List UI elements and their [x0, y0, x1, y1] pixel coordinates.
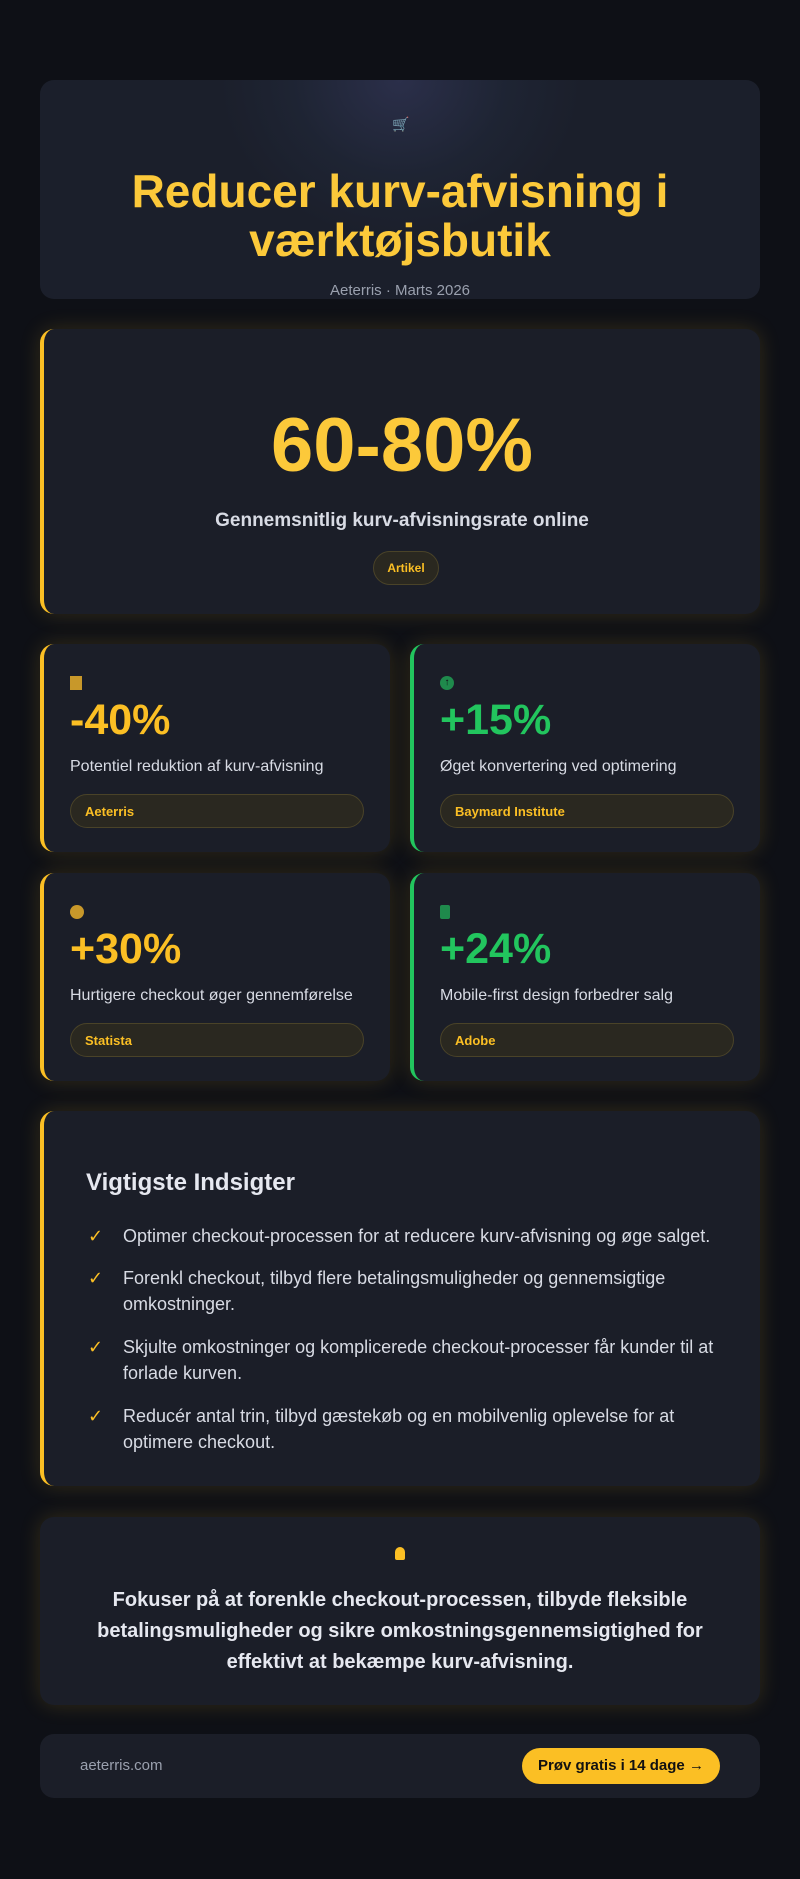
stat card: +24% — [410, 873, 760, 1081]
insight 4: ✓ — [88, 1406, 103, 1426]
stat card: -40%: -40% — [70, 696, 170, 744]
badge: Artikel — [373, 551, 439, 585]
insight 3: Skjulte omkostninger og komplicerede checkout-processer får kunder til at forlade kurven. — [123, 1337, 713, 1383]
panel: key insights — [40, 1111, 760, 1486]
stat card: +15%: Øget konvertering ved optimering — [440, 758, 677, 775]
hero stat card — [40, 329, 760, 614]
title: værktøjsbutik — [249, 214, 551, 266]
hero value: 60-80% — [271, 403, 533, 488]
icon: lightbulb — [395, 1547, 405, 1560]
stat card: +30%: +30% — [70, 925, 181, 973]
insight 1: Optimer checkout-processen for at reducere kurv-afvisning og øge salget. — [123, 1226, 710, 1246]
stat card: +30% — [40, 873, 390, 1081]
stat card: +30%: Hurtigere checkout øger gennemførelse — [70, 987, 353, 1004]
footer url: aeterris.com — [80, 1757, 163, 1774]
stat card: -40%: Potentiel reduktion af kurv-afvisning — [70, 758, 323, 775]
insight 3: ✓ — [88, 1337, 103, 1357]
insight 2: Forenkl checkout, tilbyd flere betalingsmuligheder og gennemsigtige omkostninger. — [123, 1268, 665, 1314]
icon: up arrow circle — [440, 676, 454, 690]
panel: conclusion — [40, 1517, 760, 1705]
subtitle: Aeterris · Marts 2026 — [330, 282, 470, 299]
insight 4: Reducér antal trin, tilbyd gæstekøb og en mobilvenlig oplevelse for at optimere checkout. — [123, 1406, 674, 1452]
title — [132, 165, 668, 266]
stat card: +24%: Adobe — [455, 1033, 495, 1048]
icon: phone — [440, 905, 450, 919]
stat card: +15%: +15% — [440, 696, 551, 744]
header card — [40, 80, 760, 299]
insight 2: ✓ — [88, 1268, 103, 1288]
hero description: Gennemsnitlig kurv-afvisningsrate online — [215, 510, 589, 531]
insight 1: ✓ — [88, 1226, 103, 1246]
icon: cart: 🛒 — [392, 116, 409, 132]
stat card: -40% — [40, 644, 390, 852]
stat card: +24%: Mobile-first design forbedrer salg — [440, 987, 673, 1004]
stat card: -40%: Aeterris — [85, 804, 134, 819]
title: Reducer kurv-afvisning i — [132, 165, 668, 217]
icon: up arrow circle: ↑ — [444, 677, 450, 688]
footer — [40, 1734, 760, 1798]
insights heading: Vigtigste Indsigter — [86, 1169, 295, 1196]
conclusion text: Fokuser på at forenkle checkout-processen, tilbyde fleksible betalingsmuligheder og sikre omkostningsgennemsigtighed for effektivt at bekæmpe kurv-afvisning. — [97, 1589, 703, 1673]
stat card: +15%: Baymard Institute — [455, 804, 565, 819]
icon: square — [70, 676, 82, 690]
icon: clock — [70, 905, 84, 919]
stat card: +15% — [410, 644, 760, 852]
CTA button: Prøv gratis i 14 dage → — [538, 1757, 704, 1774]
badge: Artikel: Artikel — [387, 561, 425, 575]
stat card: +24%: +24% — [440, 925, 551, 973]
stat card: +30%: Statista — [85, 1033, 132, 1048]
CTA button — [522, 1748, 720, 1784]
